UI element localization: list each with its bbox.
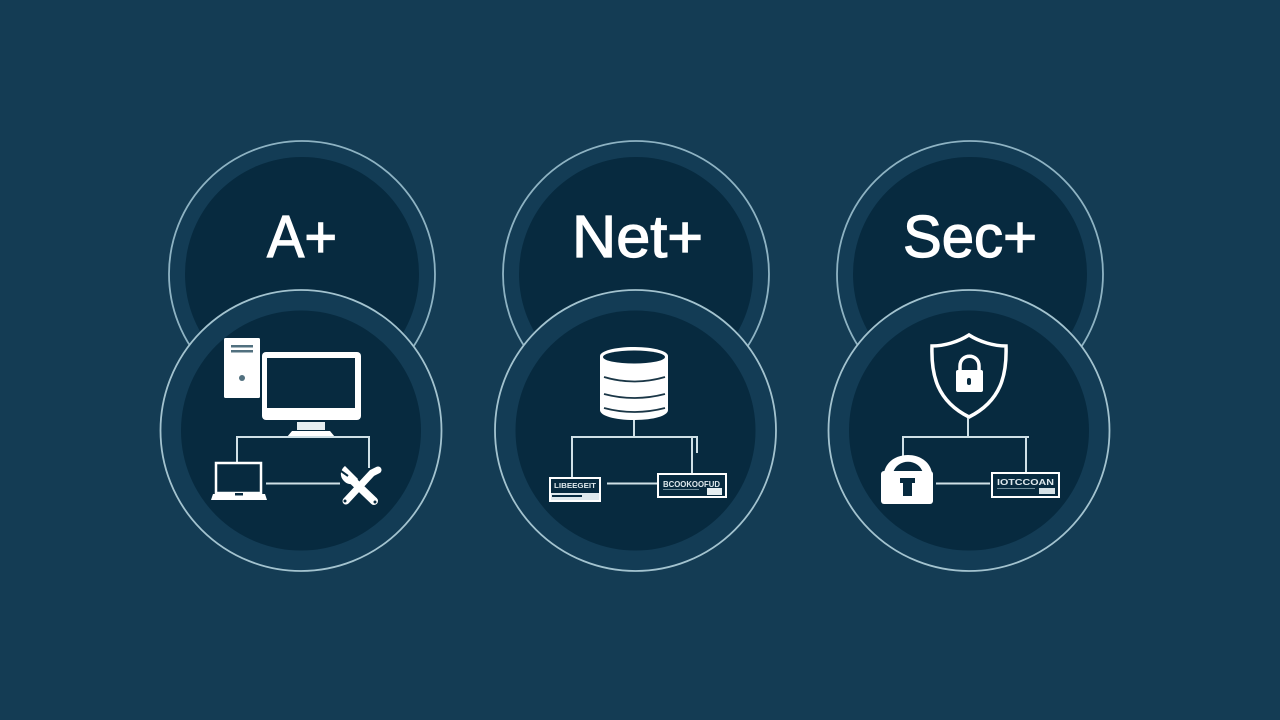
device box: Sec+: IOTCCOAN xyxy=(997,478,1054,487)
device box: left: LIBEEGEIT xyxy=(554,481,596,490)
icon: monitor xyxy=(262,352,361,437)
connector lines xyxy=(572,420,697,484)
device box: right xyxy=(658,474,726,497)
device box: left xyxy=(550,478,600,501)
Net+ top badge xyxy=(503,141,769,407)
icon: computer tower xyxy=(224,338,260,398)
panel: Net+ xyxy=(495,141,776,571)
device box: Sec+ xyxy=(992,473,1059,497)
A+ bottom badge xyxy=(160,290,442,571)
panel: Sec+ xyxy=(828,141,1110,571)
icon: laptop xyxy=(211,463,267,500)
icon: database cylinder xyxy=(600,347,668,420)
heading: Sec+: Sec+ xyxy=(903,204,1037,270)
connector lines xyxy=(237,437,369,484)
connector lines xyxy=(903,418,1029,484)
Sec+ top badge xyxy=(837,141,1103,407)
icon: shield with padlock xyxy=(932,335,1006,417)
icon: large padlock xyxy=(881,455,933,504)
device box: right: BCOOKOOFUD xyxy=(663,480,720,489)
heading: Net+: Net+ xyxy=(572,204,703,270)
icon: wrench and screwdriver xyxy=(341,466,378,504)
A+ top badge xyxy=(169,141,435,407)
heading: A+: A+ xyxy=(267,204,337,270)
Sec+ bottom badge xyxy=(828,290,1110,571)
panel: A+ xyxy=(160,141,442,571)
Net+ bottom badge xyxy=(495,290,776,571)
